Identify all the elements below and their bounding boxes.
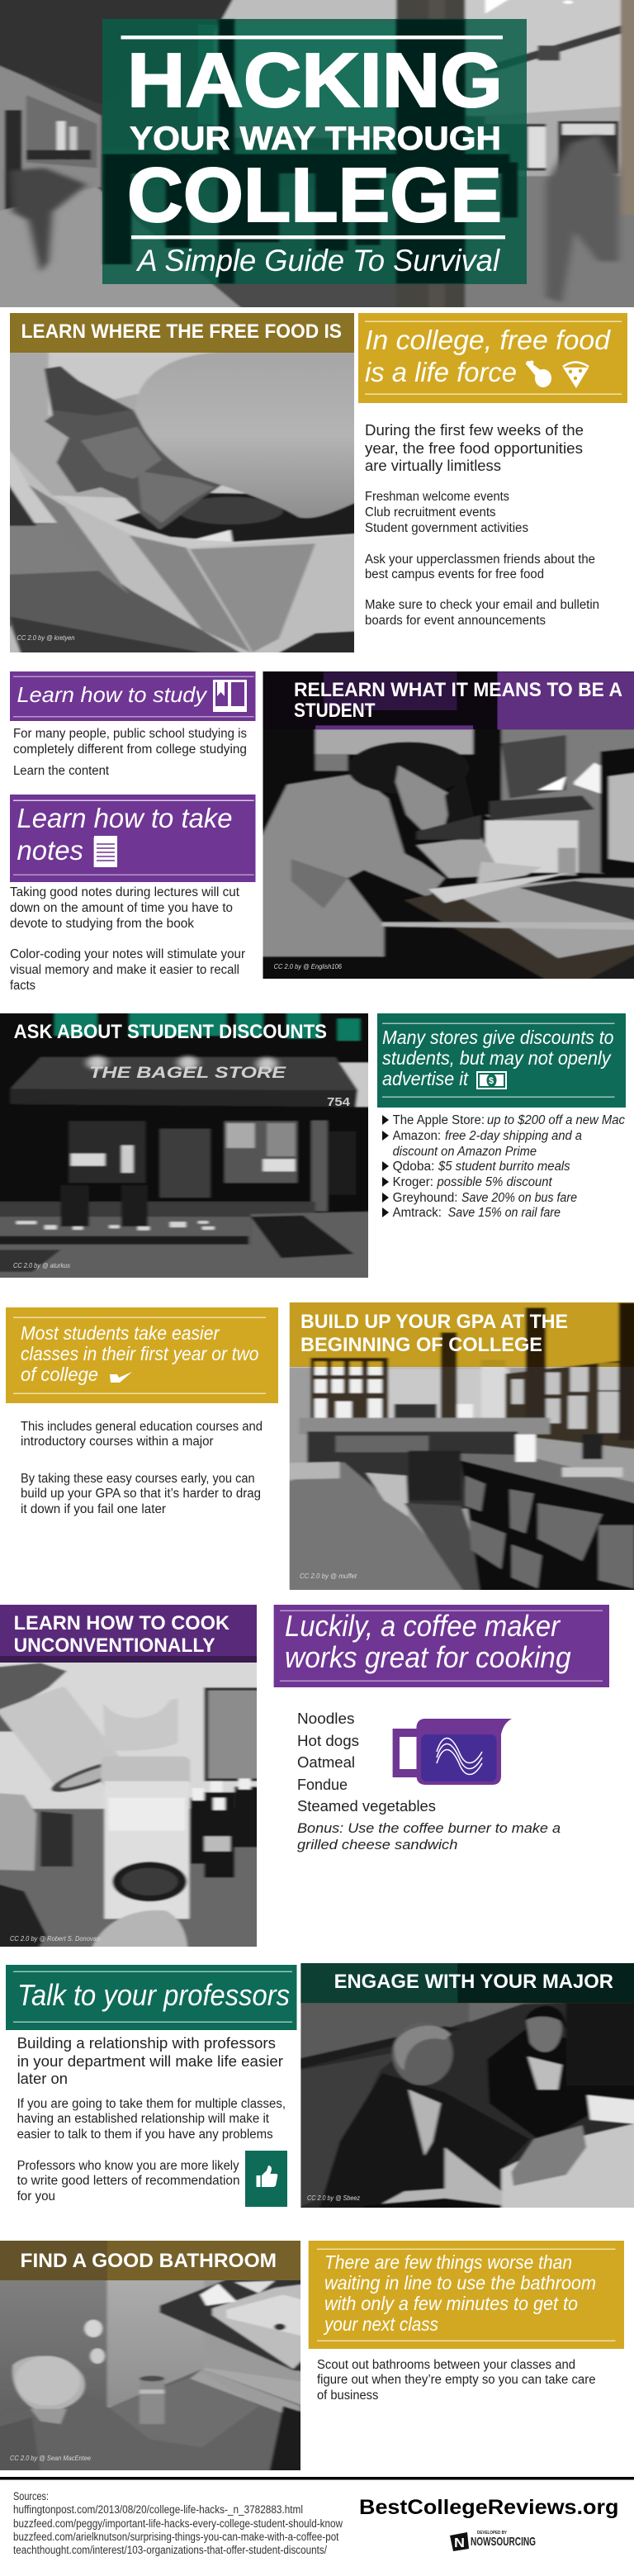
callout: many stores give discounts: students, but may not openly [382,1047,612,1069]
text block: scout bathrooms: figure out when they’re empty so you can take care [317,2373,596,2387]
logo: NowSourcing: DEVELOPED BY [477,2531,508,2536]
photo credit: CC 2.0 by @ muffet [300,1572,357,1580]
list: student discounts: Greyhound: [393,1191,457,1205]
callout: few things worse: with only a few minutes to get to [324,2293,578,2314]
photo: burger in paper tray [10,313,354,652]
photo credit: CC 2.0 by @ kretyen [17,633,75,642]
callout: learn how to take notes [10,795,256,882]
text block: free food details: year, the free food opportunities [365,440,583,457]
panel: bathroom [0,2230,624,2483]
text block: taking notes: devote to studying from the book [10,917,194,931]
banner: purple overlay [312,725,476,729]
callout: free food is a life force: is a life force [365,357,517,387]
text block: scout bathrooms [317,2358,596,2403]
callout: easier classes: of college [21,1364,98,1385]
list: things to cook: Oatmeal [297,1754,355,1771]
hero photo: school hallway [0,0,634,320]
panel: professors [6,1963,634,2208]
heading: engage with your major: ENGAGE WITH YOUR MAJOR [334,1971,613,1993]
text block: building relationships: Building a relationship with professors [17,2035,276,2052]
logo: NowSourcing [450,2531,536,2551]
heading: build up your gpa: BEGINNING OF COLLEGE [300,1334,542,1356]
text block: free food details: Make sure to check your email and bulletin [365,598,599,612]
heading: relearn what it means to be a student [294,679,622,722]
heading: relearn what it means to be a student: RELEARN WHAT IT MEANS TO BE A [294,679,622,701]
callout: free food is a life force [358,313,627,403]
logo: BestCollegeReviews.org: BestCollegeReviews.org [359,2496,618,2519]
icon: coffee pot [393,1719,512,1785]
photo: professor and student [300,1963,634,2208]
list: student discounts: Save 20% on bus fare [461,1191,577,1205]
text block: free food details: Ask your upperclassmen friends about the [365,553,595,567]
text block: taking notes: Color-coding your notes will stimulate your [10,947,245,961]
banner: gold overlay [10,313,354,353]
photo: library [275,1297,634,1600]
text block: free food details [365,422,599,628]
text block: easy courses: it down if you fail one later [21,1502,166,1516]
logo: NowSourcing: NOWSOURCING [471,2535,536,2549]
hero section [0,0,634,320]
text block: easy courses: By taking these easy courses early, you can [21,1472,255,1486]
photo credit: CC 2.0 by @ Sean MacEntee [10,2454,91,2462]
green title panel [102,19,527,284]
text block: building relationships: If you are going to take them for multiple classes, [17,2097,286,2111]
logo: NowSourcing: N [454,2536,465,2550]
text block: taking notes: Taking good notes during lectures will cut [10,885,240,899]
panel: study and notes [10,661,634,993]
list: things to cook: Fondue [297,1777,348,1793]
heading: build up your gpa: BUILD UP YOUR GPA AT THE [300,1311,568,1333]
text block: building relationships: Professors who know you are more likely [17,2159,239,2173]
callout: coffee maker cooking [274,1605,609,1687]
text block: building relationships: in your department will make life easier [17,2053,283,2070]
callout: learn how to take notes: Learn how to take [17,803,233,833]
awning lettering [91,1067,350,1106]
text block: building relationships: to write good letters of recommendation [17,2174,239,2188]
callout: many stores give discounts [377,1013,626,1108]
heading: learn how to cook unconventionally: UNCONVENTIONALLY [14,1634,215,1657]
callout: free food is a life force: In college, free food [365,325,612,355]
text block: easy courses [21,1420,263,1516]
heading: learn how to cook unconventionally: LEARN HOW TO COOK [14,1612,230,1634]
text block: studying [13,727,247,778]
text block: building relationships: for you [17,2189,55,2204]
hero title: YOUR WAY THROUGH [130,121,501,157]
photo: the bagel store [0,1013,368,1278]
list: student discounts: up to $200 off a new Mac [487,1113,625,1127]
callout: few things worse: There are few things worse than [324,2251,572,2273]
heading: ask about student discounts: ASK ABOUT STUDENT DISCOUNTS [14,1021,327,1043]
photo: student at laptop [263,671,634,979]
icon: dollar bill [476,1071,507,1089]
text block: taking notes [10,885,245,993]
callout: talk to your professors [6,1965,297,2030]
list: student discounts [382,1113,625,1220]
callout: learn how to study: Learn how to study [17,682,208,707]
callout: coffee maker cooking: works great for cooking [285,1640,571,1674]
icon: notepad [94,836,117,867]
callout: coffee maker cooking: Luckily, a coffee maker [285,1609,561,1643]
text block: studying: completely different from college studying [13,742,247,757]
sources: Sources: [13,2490,49,2502]
text block: building relationships: easier to talk to them if you have any problems [17,2128,273,2142]
text block: scout bathrooms: Scout out bathrooms between your classes and [317,2358,575,2372]
heading: relearn what it means to be a student: STUDENT [294,700,376,722]
text block: free food details: Student government activities [365,521,528,535]
banner: gold overlay [107,2241,300,2280]
banner: gold overlay [290,1302,634,1367]
heading: learn how to cook unconventionally [14,1612,230,1657]
text block: studying: Learn the content [13,764,110,778]
photo credit: CC 2.0 by @ aturkus [13,1261,71,1269]
text block: easy courses: This includes general education courses and [21,1420,263,1434]
hero title: COLLEGE [127,152,502,238]
awning lettering: 754 [327,1095,351,1109]
list: student discounts: Amazon: [393,1129,441,1143]
text block: free food details: During the first few weeks of the [365,422,584,439]
panel: GPA [6,1297,634,1600]
list: student discounts: $5 student burrito meals [438,1160,570,1174]
sources: buzzfeed.com/peggy/important-life-hacks-every-college-student-should-know [13,2517,343,2530]
banner: purple overlay [0,1605,257,1656]
sources: buzzfeed.com/arielknutson/surprising-things-you-can-make-with-a-coffee-pot [13,2531,339,2543]
sources: teachthought.com/interest/103-organizations-that-offer-student-discounts/ [13,2544,327,2556]
callout: easier classes: classes in their first year or two [21,1343,259,1364]
text block: studying: For many people, public school studying is [13,727,247,741]
heading: learn where the free food is: LEARN WHERE THE FREE FOOD IS [21,320,342,343]
photo credit: CC 2.0 by @ Robert S. Donovan [10,1934,100,1943]
awning lettering: THE BAGEL STORE [89,1065,287,1082]
text block: free food details: Freshman welcome events [365,490,509,504]
callout: many stores give discounts: advertise it [382,1068,470,1089]
list: things to cook [297,1710,561,1853]
list: student discounts: possible 5% discount [437,1175,552,1189]
callout: few things worse [309,2241,624,2349]
icon: thumbs up [245,2151,287,2207]
callout: easier classes [6,1307,278,1403]
sources [13,2490,343,2556]
icon: chicken leg [526,360,551,387]
footer [0,2477,634,2556]
text block: building relationships: having an established relationship will make it [17,2112,270,2126]
text block: easy courses: introductory courses within a major [21,1435,214,1449]
text block: free food details: best campus events for free food [365,567,544,581]
list: things to cook: Steamed vegetables [297,1798,436,1815]
panel: cooking [0,1594,609,1957]
footer rule [0,2477,634,2479]
list bullets [382,1115,389,1217]
text block: scout bathrooms: of business [317,2389,379,2403]
hero title: HACKING [127,37,503,123]
text block: taking notes: facts [10,979,35,993]
callout: learn how to take notes: notes [17,835,83,866]
photo credit: CC 2.0 by @ English106 [274,962,342,970]
heading: build up your gpa [300,1311,568,1356]
list: student discounts: Save 15% on rail fare [448,1206,561,1220]
text block: free food details: Club recruitment events [365,505,496,519]
text block: easy courses: build up your GPA so that it’s harder to drag [21,1487,261,1501]
list: student discounts: The Apple Store: [393,1113,485,1127]
text block: taking notes: visual memory and make it easier to recall [10,963,239,977]
text block: taking notes: down on the amount of time you have to [10,901,233,915]
list: student discounts: Amtrack: [393,1206,442,1220]
list: student discounts: discount on Amazon Prime [393,1145,537,1159]
list: things to cook: grilled cheese sandwich [297,1837,457,1853]
icon: pizza slice [563,362,589,388]
callout: learn how to study [10,671,256,721]
text block: free food details: are virtually limitless [365,458,501,474]
text block: building relationships: later on [17,2071,68,2087]
panel: free food [0,306,627,663]
list: student discounts: free 2-day shipping and a [445,1129,582,1143]
callout: few things worse: waiting in line to use the bathroom [324,2272,596,2294]
photo credit: CC 2.0 by @ Sbeez [307,2194,361,2202]
text block: building relationships [17,2035,286,2204]
list: things to cook: Noodles [297,1710,355,1727]
photo: coffee maker [0,1605,257,1947]
icon: check mark [110,1372,132,1383]
hero subtitle: A Simple Guide To Survival [136,244,501,278]
panel: student discounts [0,1008,626,1288]
list: student discounts: Qdoba: [393,1160,434,1174]
list: things to cook: Hot dogs [297,1733,359,1749]
callout: few things worse: your next class [323,2313,438,2335]
callout: many stores give discounts: Many stores give discounts to [382,1027,614,1048]
heading: find a good bathroom: FIND A GOOD BATHROOM [20,2250,277,2272]
list: student discounts: Kroger: [393,1175,433,1189]
icon: dollar bill: $ [489,1076,494,1086]
sources: huffingtonpost.com/2013/08/20/college-life-hacks-_n_3782883.html [13,2503,303,2516]
text block: free food details: boards for event announcements [365,614,546,628]
icon: open book [213,680,247,712]
banner: green overlay [300,1963,634,2003]
photo: bathroom [0,2241,300,2470]
callout: talk to your professors: Talk to your professors [17,1978,290,2012]
hero title [121,36,505,240]
list: things to cook: Bonus: Use the coffee burner to make a [297,1820,561,1836]
callout: easier classes: Most students take easier [21,1322,220,1344]
